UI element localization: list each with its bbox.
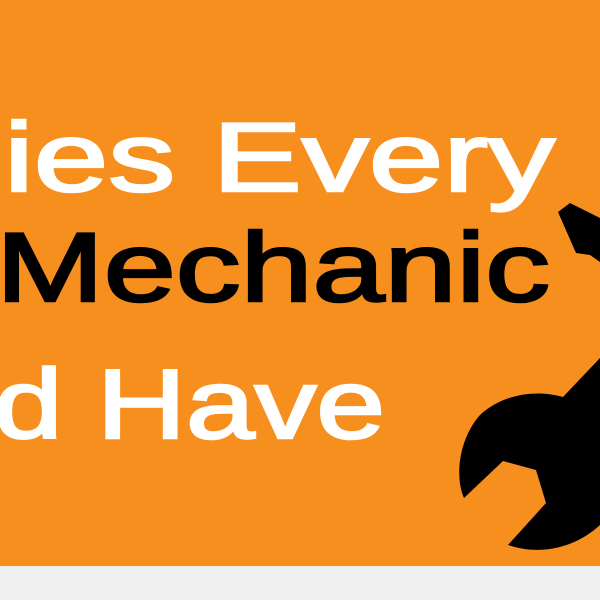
icon: wrench and screwdriver	[459, 203, 600, 550]
title	[0, 102, 555, 459]
title line 1: ies Every	[4, 102, 555, 212]
title line 2: Mechanic	[0, 212, 550, 322]
title line 3: d Have	[0, 349, 385, 459]
